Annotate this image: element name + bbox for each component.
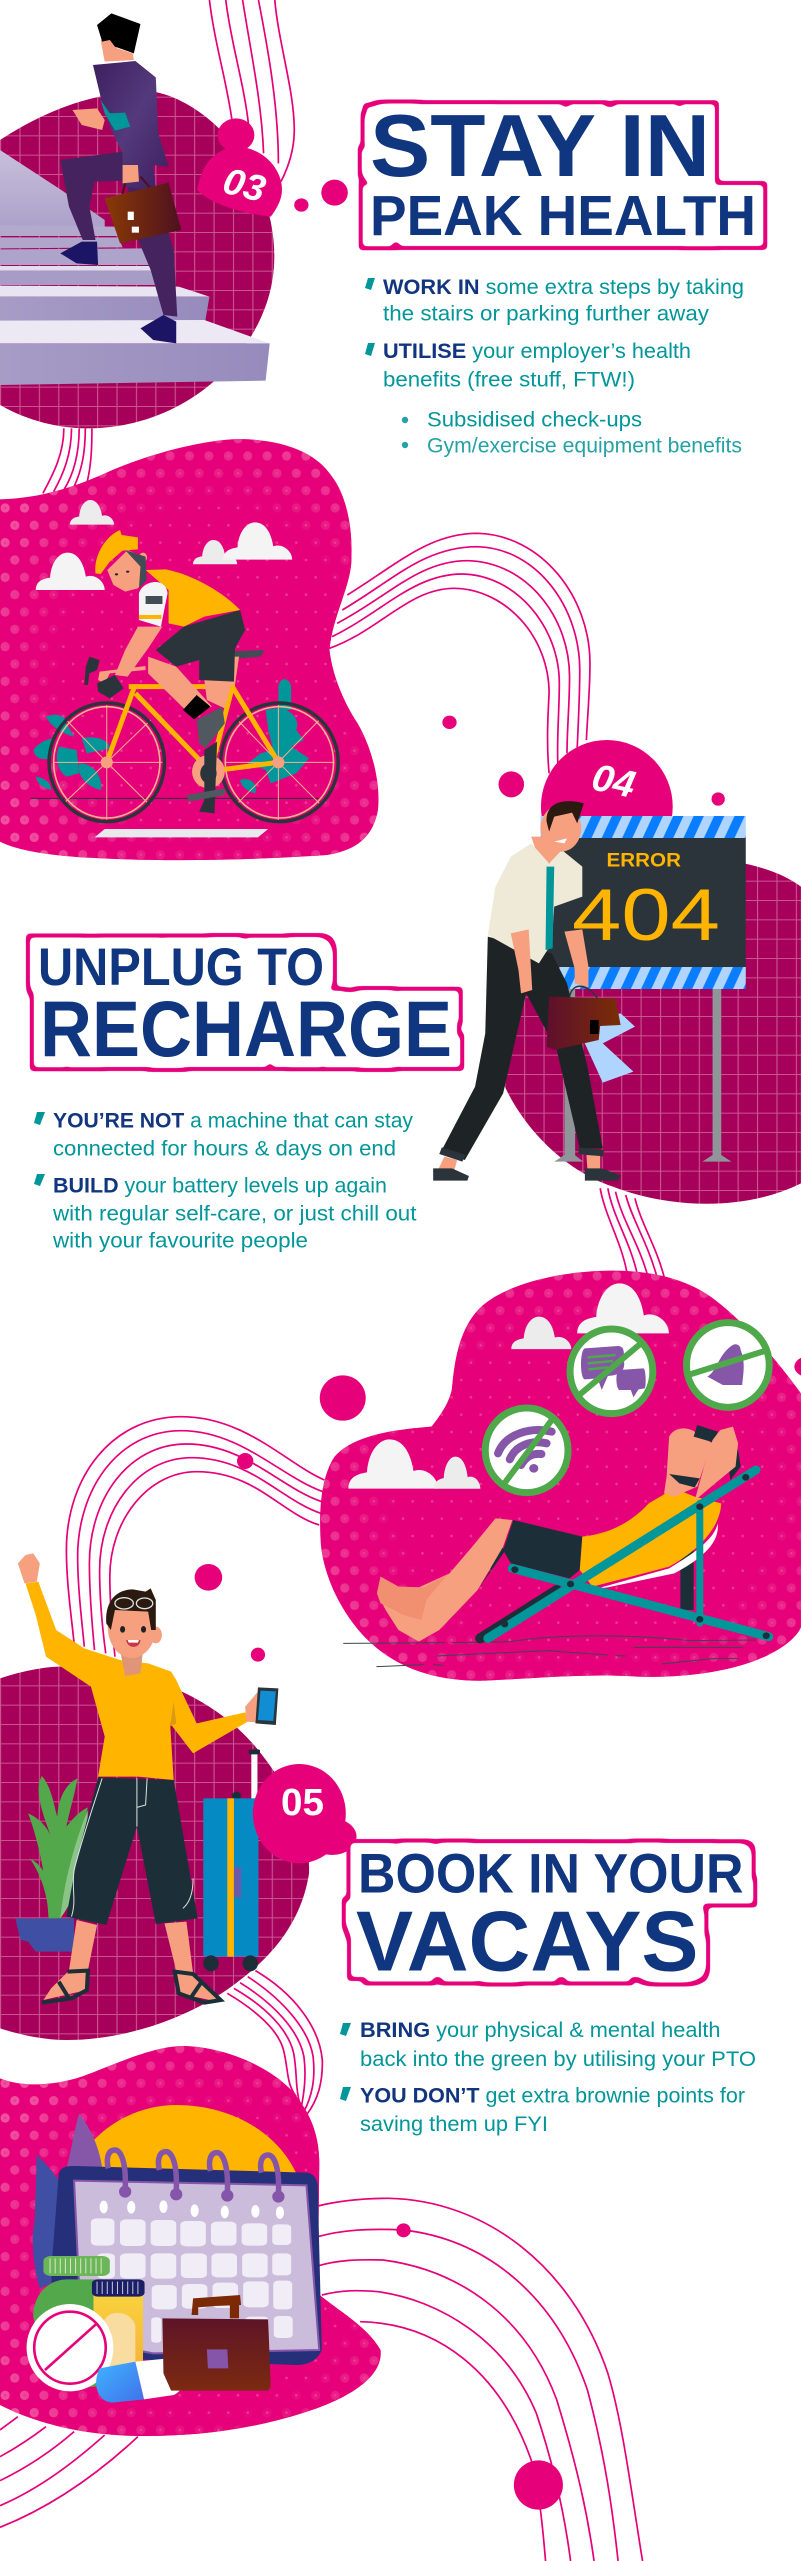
bullet: build: with regular self-care, or just chill out bbox=[52, 1203, 417, 1226]
dots bbox=[294, 180, 348, 212]
panel: cycling illustration bbox=[0, 439, 378, 860]
calendar bbox=[51, 2150, 322, 2365]
panel: lounging illustration bbox=[66, 1271, 801, 1681]
sign label: error: ERROR bbox=[606, 851, 681, 872]
bullet: you don't: YOU DON’T get extra brownie points for bbox=[360, 2085, 745, 2108]
heading: stay in peak health: PEAK HEALTH bbox=[370, 184, 756, 248]
grid blob bbox=[490, 856, 801, 1204]
bullet: you're not bbox=[34, 1110, 413, 1161]
sign posts bbox=[554, 989, 731, 1162]
plant bbox=[15, 1776, 88, 1952]
green bottle bbox=[33, 2256, 110, 2387]
no messages icon bbox=[570, 1329, 653, 1414]
road stripe bbox=[94, 829, 268, 837]
sub list: Subsidised check-ups bbox=[427, 409, 642, 432]
panel: step 05 illustration bbox=[0, 1553, 357, 2115]
decorative wavy lines from top bbox=[209, 0, 294, 182]
dotted blob bbox=[320, 1271, 801, 1681]
no wifi icon bbox=[485, 1408, 568, 1493]
arcs to step 05 bbox=[66, 1417, 324, 1657]
connector lines to lounge blob bbox=[600, 1188, 664, 1277]
bullet: work in bbox=[365, 276, 744, 326]
dots bbox=[442, 716, 725, 806]
yellow bottle bbox=[92, 2279, 145, 2367]
heading: unplug to recharge bbox=[38, 938, 452, 1073]
clouds bbox=[348, 1283, 669, 1489]
panel: calendar illustration bbox=[0, 2046, 643, 2561]
sign bottom stripes bbox=[559, 967, 746, 989]
capsule bbox=[96, 2358, 184, 2403]
badge 05 bbox=[253, 1764, 357, 1863]
staircase bbox=[0, 150, 270, 385]
cyclist bbox=[95, 530, 245, 802]
arcs to bottom right bbox=[318, 2198, 643, 2561]
grid blob bbox=[0, 1666, 309, 2040]
heading: unplug to recharge: RECHARGE bbox=[40, 984, 452, 1073]
sun bbox=[66, 2105, 301, 2187]
panel: step 04 illustration bbox=[490, 816, 801, 1277]
connector lines to cycling blob bbox=[43, 428, 92, 493]
badge 04 bbox=[541, 740, 673, 873]
leaves bbox=[33, 2113, 102, 2288]
bullet: utilise: benefits (free stuff, FTW!) bbox=[383, 368, 635, 392]
arcs from cycling blob bbox=[329, 533, 590, 773]
bullet: bring: BRING your physical & mental health bbox=[360, 2019, 720, 2042]
sub list bbox=[402, 409, 742, 458]
bullet: utilise bbox=[365, 340, 691, 392]
dotted blob bbox=[0, 2046, 381, 2436]
tired worker bbox=[433, 801, 635, 1181]
bullet: bring bbox=[340, 2019, 756, 2071]
traveller bbox=[18, 1553, 278, 2003]
businessman climbing bbox=[60, 13, 181, 343]
bullet: you're not: connected for hours & days on end bbox=[53, 1138, 396, 1161]
sub list: Gym/exercise equipment benefits bbox=[427, 435, 742, 458]
heading: book in your vacays: BOOK IN YOUR bbox=[358, 1842, 744, 1905]
heading: stay in peak health: STAY IN bbox=[370, 96, 710, 195]
deck chair bbox=[480, 1470, 770, 1639]
ground strokes bbox=[343, 1636, 756, 1667]
heading: unplug to recharge: UNPLUG TO bbox=[38, 938, 324, 997]
bullet: bring: back into the green by utilising your PTO bbox=[360, 2048, 756, 2071]
bullet: you're not: YOU’RE NOT a machine that can stay bbox=[53, 1110, 413, 1133]
dots bbox=[396, 2223, 563, 2510]
panel: step 03 illustration bbox=[0, 0, 348, 493]
bicycle bbox=[49, 650, 338, 822]
heading: book in your vacays bbox=[356, 1842, 744, 1990]
bullet: work in: WORK IN some extra steps by taking bbox=[383, 276, 744, 299]
arcs to left edge bbox=[0, 2417, 138, 2527]
no-sign over bottles bbox=[27, 2304, 113, 2391]
bullet: build bbox=[34, 1174, 417, 1253]
bullet: you don't: saving them up FYI bbox=[360, 2113, 548, 2136]
badge number 05: 05 bbox=[281, 1782, 324, 1824]
badge shape 03 bbox=[197, 118, 282, 217]
plants bbox=[33, 679, 309, 793]
bullet: you don't bbox=[340, 2085, 745, 2136]
ground line bbox=[31, 797, 319, 799]
no notifications icon bbox=[687, 1323, 769, 1407]
grid blob bbox=[0, 92, 274, 428]
lounging man bbox=[377, 1425, 741, 1642]
panel: step 04 lines and dots bbox=[329, 533, 725, 873]
badge number 04: 04 bbox=[588, 757, 639, 807]
bullet: utilise: UTILISE your employer’s health bbox=[383, 340, 691, 363]
sign top stripes bbox=[540, 816, 746, 838]
sign label: 404: 404 bbox=[572, 875, 720, 956]
error sign board bbox=[540, 838, 746, 968]
heading: book in your vacays: VACAYS bbox=[356, 1895, 698, 1990]
briefcase bbox=[162, 2295, 271, 2391]
bullet: work in: the stairs or parking further away bbox=[383, 303, 710, 326]
badge number 03: 03 bbox=[219, 160, 270, 210]
heading: stay in peak health bbox=[370, 96, 756, 248]
arcs behind calendar blob bbox=[227, 1971, 322, 2115]
suitcase bbox=[203, 1749, 260, 1971]
dots bbox=[195, 1355, 801, 1662]
bullet: build: with your favourite people bbox=[52, 1230, 308, 1253]
bullet: build: BUILD your battery levels up again bbox=[53, 1175, 387, 1198]
clouds bbox=[36, 500, 292, 590]
dotted blob bbox=[0, 439, 378, 860]
